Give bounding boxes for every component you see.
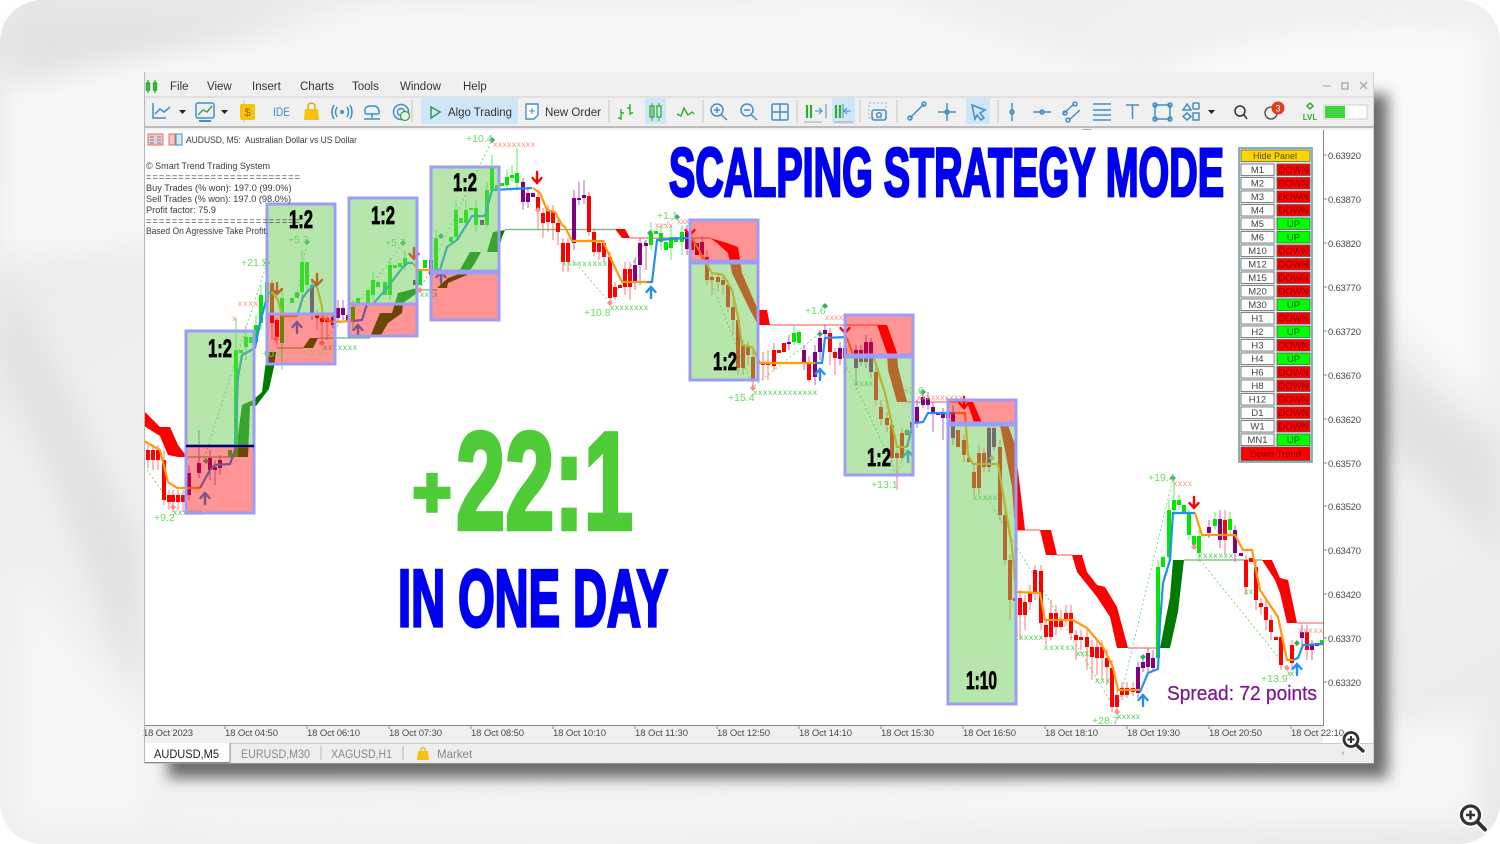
x trade markers: xx	[1244, 586, 1254, 596]
icon: cloud	[364, 106, 380, 119]
system statistics text: Profit factor: 75.9	[146, 205, 216, 215]
trade profit labels: +1.6	[805, 305, 826, 317]
trend cloud bands	[144, 229, 1323, 648]
trade profit labels: +9.2	[154, 512, 175, 524]
chart tabs: EURUSD,M30	[241, 749, 310, 761]
toolbar: New Order	[545, 105, 601, 119]
timeframe trend panel: M4	[1251, 206, 1264, 216]
down trend status	[1241, 447, 1310, 460]
x trade markers: xxxxxxxxxx	[917, 392, 964, 402]
icon: screenshot camera	[869, 103, 886, 118]
timeframe trend panel: UP	[1287, 300, 1300, 311]
price axis: 0.63820	[1328, 239, 1361, 250]
timeframe trend panel: DOWN	[1278, 394, 1309, 406]
icon: new order	[526, 104, 538, 119]
trade profit labels: +28.7	[1092, 715, 1119, 727]
icon: shopping bag	[304, 109, 319, 120]
x trade markers: xxxx	[655, 220, 674, 230]
x trade markers: xxxxx	[1117, 711, 1141, 721]
price axis: 0.63620	[1328, 415, 1361, 426]
icon: zoom in	[711, 104, 727, 120]
icon: market bag	[417, 751, 429, 760]
menu bar	[146, 80, 1367, 93]
timeframe trend panel: M5	[1251, 219, 1264, 230]
timeframe trend panel: DOWN	[1278, 178, 1309, 190]
trade profit labels: +15.4	[728, 392, 755, 404]
big result: +22:1: 22:1	[456, 404, 633, 559]
box 1: 1:2 long	[186, 331, 254, 513]
timeframe trend panel: M30	[1248, 300, 1267, 311]
icon: tile windows	[772, 104, 788, 120]
time axis: 18 Oct 2023	[143, 728, 193, 739]
time axis: 18 Oct 12:50	[717, 728, 770, 739]
hide panel button: Hide Panel	[1253, 151, 1297, 161]
icon: crosshair	[938, 103, 956, 121]
x trade markers: xxx	[677, 216, 690, 226]
timeframe trend panel: H1	[1251, 314, 1264, 324]
time axis: 18 Oct 06:10	[307, 728, 360, 739]
timeframe trend panel: DOWN	[1278, 273, 1309, 284]
x trade markers: xxxx	[825, 312, 844, 322]
application window	[143, 72, 1374, 764]
icon: text tool	[1126, 105, 1139, 119]
icon: magnifier bottom right	[1458, 802, 1485, 830]
risk reward labels: 1:2	[713, 348, 737, 376]
system statistics text: Sell Trades (% won): 197.0 (98.0%)	[146, 194, 291, 204]
time axis: 18 Oct 19:30	[1127, 728, 1180, 739]
icon: horizontal line	[1033, 111, 1051, 113]
system statistics text: ========================	[146, 172, 300, 182]
x trade markers: xxxxx	[1298, 625, 1324, 635]
x trade markers: xxx	[1076, 648, 1090, 658]
x trade markers: xxxxxx	[1014, 632, 1044, 642]
x trade markers: xxxx	[238, 298, 259, 308]
window drop shadow	[168, 94, 1388, 778]
status bar meter	[1324, 105, 1367, 119]
timeframe trend panel: H4	[1251, 354, 1264, 365]
icon: magnifier on window corner	[1342, 730, 1363, 751]
timeframe trend panel	[1239, 148, 1312, 462]
candle wicks	[236, 148, 1230, 662]
timeframe trend panel: M1	[1251, 165, 1264, 176]
x trade markers: xxxx	[420, 289, 439, 299]
timeframe trend panel: M2	[1251, 178, 1264, 190]
risk reward labels: 1:2	[208, 335, 232, 363]
icon: chart templates	[196, 103, 214, 118]
time axis: 18 Oct 16:50	[963, 728, 1016, 739]
timeframe trend panel: UP	[1287, 435, 1300, 446]
timeframe trend panel: UP	[1287, 354, 1300, 365]
x trade markers: xxxxxxxx	[610, 302, 649, 312]
chart tabs	[144, 743, 1374, 763]
trade dots	[170, 137, 1300, 715]
risk reward labels: 1:2	[453, 169, 477, 197]
trade profit labels: +10.8	[584, 307, 611, 319]
icon: fibonacci	[1093, 104, 1111, 120]
chart tabs: XAGUSD,H1	[331, 749, 392, 761]
toolbar	[153, 98, 1367, 124]
menu bar: Insert	[252, 81, 282, 93]
timeframe trend panel: DOWN	[1278, 246, 1309, 257]
menu bar: File	[170, 81, 189, 93]
down trend status: Down Trend	[1250, 449, 1301, 460]
timeframe trend panel: DOWN	[1278, 314, 1309, 324]
x trade markers: xxxx	[855, 378, 874, 388]
timeframe trend panel: DOWN	[1278, 286, 1309, 298]
icon: zoom out	[741, 104, 757, 120]
trade profit labels: +5.3	[288, 234, 309, 246]
trade profit labels: +3.6	[903, 385, 924, 397]
trade profit labels: +13.1	[871, 479, 898, 491]
icon: hosting globe	[394, 104, 408, 120]
green candle bodies	[230, 168, 1322, 658]
time axis: 18 Oct 15:30	[881, 728, 934, 739]
risk reward labels: 1:2	[289, 206, 313, 234]
trade profit labels: +10.4	[466, 133, 493, 145]
time axis: 18 Oct 11:30	[635, 728, 688, 739]
icon: one click trading	[148, 134, 163, 145]
price axis: 0.63570	[1328, 459, 1361, 470]
big result: +22:1: +	[413, 453, 451, 531]
icon: rectangle tool	[1153, 103, 1172, 121]
trade profit labels: +0.4	[262, 348, 283, 360]
box 6: 1:2 short	[845, 315, 913, 475]
timeframe trend panel: M12	[1248, 260, 1267, 270]
box 7: 1:10 short	[948, 400, 1016, 704]
toolbar: LVL	[1303, 113, 1317, 122]
icon: bar chart mode	[618, 104, 633, 120]
icon: notifications	[1265, 107, 1277, 119]
timeframe trend panel: D1	[1251, 408, 1264, 419]
x trade markers	[173, 139, 1324, 721]
icon: algo trading play	[431, 107, 440, 118]
price axis: 0.63720	[1328, 327, 1361, 338]
timeframe trend panel: M15	[1248, 273, 1267, 284]
x trade markers: xxxxxxx	[323, 342, 358, 352]
system statistics text: ========================	[146, 216, 300, 226]
system statistics text: © Smart Trend Trading System	[146, 161, 270, 171]
risk reward labels: 1:2	[867, 444, 891, 472]
price axis: 0.63320	[1328, 678, 1361, 689]
timeframe trend panel: H3	[1251, 340, 1264, 352]
time axis: 18 Oct 10:10	[553, 728, 606, 739]
icon: search	[1235, 106, 1245, 116]
timeframe trend panel: DOWN	[1278, 422, 1309, 432]
x trade markers: xxxxxxxxx	[562, 258, 608, 268]
trade dotted connectors	[147, 140, 1297, 712]
time axis: 18 Oct 20:50	[1209, 728, 1262, 739]
price axis: 0.63470	[1328, 546, 1361, 557]
time axis: 18 Oct 14:10	[799, 728, 852, 739]
icon: IDE: IDE	[273, 107, 290, 119]
price axis: 0.63920	[1328, 151, 1361, 162]
timeframe trend panel: DOWN	[1278, 381, 1309, 392]
timeframe trend panel: H2	[1251, 327, 1264, 338]
icon: LVL	[1307, 103, 1313, 109]
timeframe trend panel: DOWN	[1278, 206, 1309, 216]
price axis: 0.63370	[1328, 634, 1361, 645]
risk reward labels: 1:2	[371, 202, 395, 230]
timeframe trend panel: UP	[1287, 219, 1300, 230]
x trade markers: xxxxx	[973, 492, 998, 502]
box 2: 1:2 long	[267, 204, 335, 364]
time axis: 18 Oct 22:10	[1291, 728, 1344, 739]
subheading: in one day: IN ONE DAY	[398, 554, 668, 644]
timeframe trend panel: H12	[1249, 394, 1266, 406]
x trade markers: xxxxxxxxxxxxx	[753, 387, 818, 397]
icon: candles mode	[652, 103, 659, 121]
icon: channel	[1064, 104, 1080, 120]
icon: chart shift	[836, 105, 840, 118]
timeframe trend panel: DOWN	[1278, 368, 1309, 378]
timeframe trend panel: UP	[1287, 327, 1300, 338]
price axis: 0.63670	[1328, 371, 1361, 382]
time axis: 18 Oct 04:50	[225, 728, 278, 739]
price axis: 0.63770	[1328, 283, 1361, 294]
trade profit labels: +1.1	[657, 210, 678, 222]
menu bar: Help	[463, 81, 487, 93]
x trade markers: xxx	[1095, 675, 1111, 685]
trade profit labels: +19.4	[1148, 472, 1175, 484]
timeframe trend panel: W1	[1250, 422, 1265, 432]
big result: +22:1	[413, 404, 633, 559]
spread label: Spread: 72 points	[1167, 683, 1317, 705]
box 4: 1:2 long	[431, 167, 499, 320]
x trade markers: xxxx	[1173, 478, 1193, 488]
signal arrows	[200, 172, 1302, 706]
icon: autoscroll	[807, 105, 811, 118]
x trade markers: xx	[1287, 668, 1295, 678]
icon: line chart	[153, 103, 170, 118]
icon: chart window	[169, 134, 182, 145]
toolbar: 3	[1275, 104, 1281, 114]
icon: signals	[340, 110, 344, 114]
x trade markers: x	[232, 313, 237, 323]
time axis: 18 Oct 07:30	[389, 728, 442, 739]
risk reward boxes	[186, 167, 1016, 704]
icon: dollar market	[240, 104, 255, 120]
icon: vertical line	[1011, 103, 1013, 121]
menu bar: View	[207, 81, 232, 93]
system statistics text: Based On Agressive Take Profit.	[146, 226, 268, 236]
time axis	[143, 725, 1344, 739]
system statistics text	[146, 161, 300, 236]
trade profit labels	[154, 133, 1288, 727]
trend line orange and blue	[144, 188, 1323, 692]
icon: shapes	[1183, 104, 1191, 110]
price axis: 0.63520	[1328, 502, 1361, 513]
toolbar: Algo Trading	[448, 105, 512, 119]
timeframe trend panel: H8	[1251, 381, 1264, 392]
red candle bodies	[148, 196, 1307, 707]
hide panel button	[1241, 150, 1310, 162]
timeframe trend panel: DOWN	[1278, 165, 1309, 176]
price axis: 0.63870	[1328, 195, 1361, 206]
icon: line mode	[677, 108, 694, 116]
timeframe trend panel: DOWN	[1278, 408, 1309, 419]
timeframe trend panel: MN1	[1247, 435, 1268, 446]
menu bar: Window	[400, 81, 442, 93]
candlesticks	[148, 148, 1322, 714]
x trade markers: xxxxxxxxx	[493, 139, 536, 149]
menu bar: Charts	[300, 81, 334, 93]
system statistics text: Buy Trades (% won): 197.0 (99.0%)	[146, 183, 292, 193]
chart area	[143, 130, 1373, 744]
timeframe trend panel: DOWN	[1278, 260, 1309, 270]
chart tabs: Market	[437, 749, 473, 761]
risk reward labels	[208, 169, 997, 695]
trade profit labels: +21.5	[241, 257, 268, 269]
price axis	[144, 130, 1361, 726]
timeframe trend panel: M10	[1248, 246, 1267, 257]
box 5: 1:2 short	[690, 220, 758, 380]
chart symbol header: AUDUSD, M5: Australian Dollar vs US Dollar	[186, 135, 357, 145]
icon: trendline	[910, 104, 924, 118]
timeframe trend panel: DOWN	[1278, 192, 1309, 203]
icon: cursor	[972, 105, 985, 120]
toolbar: $	[244, 107, 251, 119]
chart tabs: AUDUSD,M5	[154, 749, 219, 761]
box 3: 1:2 long	[349, 198, 417, 336]
timeframe trend panel: M20	[1248, 286, 1267, 298]
timeframe trend panel: M3	[1251, 192, 1264, 203]
trade profit labels: +3.0	[303, 347, 324, 359]
timeframe trend panel: UP	[1287, 232, 1300, 244]
purple candle bodies	[189, 182, 1317, 693]
trade profit labels: +13.9	[1261, 673, 1288, 685]
time axis: 18 Oct 18:10	[1045, 728, 1098, 739]
timeframe trend panel: DOWN	[1278, 340, 1309, 352]
x trade markers: xxxxxxx	[1198, 550, 1234, 560]
trade profit labels: +5.7	[385, 237, 406, 249]
timeframe trend panel: H6	[1251, 368, 1264, 378]
x trade markers: xxxxxx	[1044, 642, 1076, 652]
time axis: 18 Oct 08:50	[471, 728, 524, 739]
timeframe trend panel: M6	[1251, 232, 1264, 244]
menu bar: Tools	[352, 81, 379, 93]
risk reward labels: 1:10	[966, 667, 997, 695]
icon: app logo	[146, 80, 156, 93]
x trade markers: xxxxxx	[173, 507, 203, 517]
price axis: 0.63420	[1328, 590, 1361, 601]
